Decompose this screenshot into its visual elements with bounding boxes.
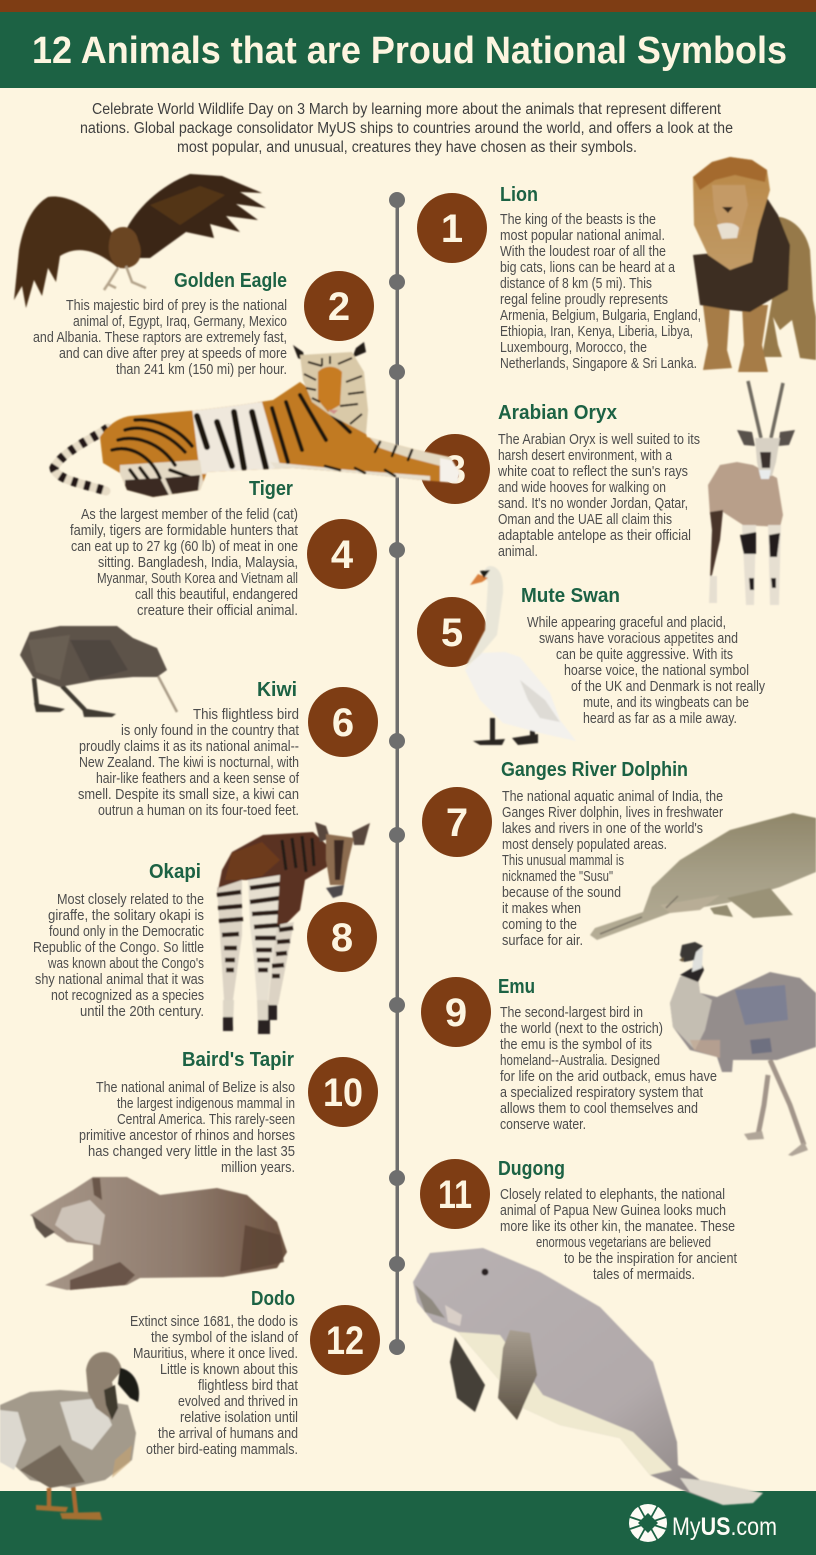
heading and text: golden eagle: This majestic bird of prey is the national xyxy=(66,297,287,314)
heading and text: baird's tapir xyxy=(79,1049,295,1176)
heading and text: okapi: Republic of the Congo. So little xyxy=(33,939,204,956)
icon: ganges river dolphin xyxy=(590,813,816,940)
heading and text: tiger: Tiger xyxy=(249,478,293,500)
heading and text: mute swan: can be quite aggressive. With its xyxy=(556,646,733,663)
heading and text: lion: big cats, lions can be heard at a xyxy=(500,259,676,276)
heading and text: tiger: call this beautiful, endangered xyxy=(135,586,298,603)
heading and text: golden eagle: animal of, Egypt, Iraq, Germany, Mexico xyxy=(73,313,287,330)
heading and text: mute swan: While appearing graceful and placid, xyxy=(527,614,726,631)
heading and text: okapi: giraffe, the solitary okapi is xyxy=(48,907,204,924)
heading and text: lion: Armenia, Belgium, Bulgaria, England, xyxy=(500,307,701,324)
heading and text: ganges river dolphin: surface for air. xyxy=(502,932,583,949)
heading and text: ganges river dolphin: because of the sound xyxy=(502,884,621,901)
heading and text: lion: regal feline proudly represents xyxy=(500,291,668,308)
heading and text: kiwi xyxy=(78,679,300,819)
heading and text: baird's tapir: has changed very little in the last 35 xyxy=(88,1143,295,1160)
heading and text: dodo: relative isolation until xyxy=(180,1409,298,1426)
heading and text: tiger: sitting. Bangladesh, India, Malaysia, xyxy=(98,554,298,571)
heading and text: ganges river dolphin: Ganges River Dolphin xyxy=(501,759,688,781)
heading and text: mute swan: heard as far as a mile away. xyxy=(583,710,737,727)
icon: emu xyxy=(670,942,816,1156)
number badges: 7 xyxy=(446,801,468,845)
heading and text: emu: conserve water. xyxy=(500,1116,586,1133)
heading and text: dugong: tales of mermaids. xyxy=(593,1266,695,1283)
heading and text: emu: Emu xyxy=(498,976,535,998)
heading and text: arabian oryx: and wide hooves for walking on xyxy=(498,479,666,496)
heading and text: kiwi: Kiwi xyxy=(257,679,297,701)
heading and text: lion: distance of 8 km (5 mi). This xyxy=(500,275,652,292)
heading and text: lion: With the loudest roar of all the xyxy=(500,243,666,260)
heading and text: dugong: Closely related to elephants, the national xyxy=(500,1186,725,1203)
header banner xyxy=(0,0,816,88)
heading and text: mute swan: Mute Swan xyxy=(521,585,620,607)
heading and text: tiger: Myanmar, South Korea and Vietnam all xyxy=(97,570,298,587)
heading and text: okapi xyxy=(33,861,204,1020)
heading and text: dodo: Dodo xyxy=(251,1288,295,1310)
heading and text: dodo: the symbol of the island of xyxy=(151,1329,299,1346)
icon: mute swan xyxy=(465,566,576,745)
heading and text: dodo: Mauritius, where it once lived. xyxy=(133,1345,298,1362)
heading and text: dugong: enormous vegetarians are believed xyxy=(536,1234,711,1251)
heading and text: emu: a specialized respiratory system that xyxy=(500,1084,704,1101)
heading and text: arabian oryx xyxy=(497,402,700,560)
heading and text: lion xyxy=(500,184,701,372)
heading and text: dodo: evolved and thrived in xyxy=(178,1393,298,1410)
number badges: 10 xyxy=(323,1071,363,1115)
heading and text: lion: Luxembourg, Morocco, the xyxy=(500,339,647,356)
heading and text: baird's tapir: primitive ancestor of rhinos and horses xyxy=(79,1127,295,1144)
heading and text: okapi: not recognized as a species xyxy=(51,987,204,1004)
number badges: 9 xyxy=(445,991,467,1035)
heading and text: okapi: was known about the Congo's xyxy=(47,955,204,972)
logo: MyUS.com: MyUS.com xyxy=(672,1513,777,1541)
icon: dodo xyxy=(0,1352,139,1520)
heading and text: tiger: can eat up to 27 kg (60 lb) of meat in one xyxy=(71,538,298,555)
heading and text: emu: The second-largest bird in xyxy=(500,1004,643,1021)
heading and text: lion: most popular national animal. xyxy=(500,227,665,244)
heading and text: kiwi: hair-like feathers and a keen sense of xyxy=(96,770,300,787)
heading and text: kiwi: This flightless bird xyxy=(193,706,299,723)
heading and text: ganges river dolphin: This unusual mammal is xyxy=(502,852,624,869)
heading and text: okapi: Okapi xyxy=(149,861,201,883)
heading and text: arabian oryx: animal. xyxy=(498,543,538,560)
heading and text: lion: Lion xyxy=(500,184,538,206)
number badges: 4 xyxy=(331,533,354,577)
icon: lion xyxy=(693,157,816,372)
number badges: 1 xyxy=(441,207,463,251)
heading and text: okapi: Most closely related to the xyxy=(57,891,204,908)
heading and text: tiger: family, tigers are formidable hunters that xyxy=(70,522,299,539)
heading and text: kiwi: outrun a human on its four-toed feet. xyxy=(98,802,299,819)
heading and text: ganges river dolphin: lakes and rivers in one of the world's xyxy=(502,820,703,837)
icon: baird's tapir xyxy=(30,1177,287,1290)
heading and text: ganges river dolphin: Ganges River dolphin, lives in freshwater xyxy=(502,804,723,821)
heading and text: mute swan xyxy=(521,585,765,727)
number badges xyxy=(304,193,492,1375)
intro paragraph: nations. Global package consolidator MyUS ships to countries around the world, and offers a look at the xyxy=(80,120,733,137)
heading and text: okapi: until the 20th century. xyxy=(80,1003,204,1020)
icon: arabian oryx xyxy=(708,381,795,605)
icon: golden eagle xyxy=(14,174,266,308)
heading and text: okapi: shy national animal that it was xyxy=(35,971,204,988)
logo: MyUS.com xyxy=(629,1504,777,1542)
heading and text: lion: Ethiopia, Iran, Kenya, Liberia, Libya, xyxy=(500,323,693,340)
heading and text: ganges river dolphin xyxy=(501,759,723,949)
heading and text: dodo: other bird-eating mammals. xyxy=(146,1441,298,1458)
heading and text: golden eagle: Golden Eagle xyxy=(174,270,287,292)
heading and text: arabian oryx: The Arabian Oryx is well suited to its xyxy=(498,431,700,448)
heading and text: lion: Netherlands, Singapore & Sri Lanka. xyxy=(500,355,697,372)
heading and text: mute swan: hoarse voice, the national symbol xyxy=(564,662,749,679)
heading and text: dodo: Little is known about this xyxy=(160,1361,298,1378)
intro paragraph xyxy=(80,101,733,156)
number badges: 5 xyxy=(441,611,463,655)
intro paragraph: most popular, and unusual, creatures they have chosen as their symbols. xyxy=(177,139,637,156)
heading and text: golden eagle xyxy=(33,270,287,378)
heading and text: baird's tapir: Central America. This rarely-seen xyxy=(117,1111,295,1128)
heading and text: emu: homeland--Australia. Designed xyxy=(500,1052,660,1069)
heading and text: baird's tapir: Baird's Tapir xyxy=(182,1049,294,1071)
heading and text: emu: the world (next to the ostrich) xyxy=(500,1020,663,1037)
heading and text: dodo: Extinct since 1681, the dodo is xyxy=(130,1313,298,1330)
heading and text: dodo xyxy=(130,1288,299,1458)
heading and text: emu: the emu is the symbol of its xyxy=(500,1036,652,1053)
heading and text: baird's tapir: the largest indigenous mammal in xyxy=(117,1095,295,1112)
heading and text: dodo: the arrival of humans and xyxy=(158,1425,298,1442)
heading and text: kiwi: proudly claims it as its national animal-- xyxy=(79,738,299,755)
heading and text: mute swan: of the UK and Denmark is not really xyxy=(571,678,765,695)
number badges: 11 xyxy=(438,1173,472,1217)
heading and text: ganges river dolphin: coming to the xyxy=(502,916,577,933)
heading and text: kiwi: smell. Despite its small size, a kiwi can xyxy=(78,786,299,803)
heading and text: arabian oryx: harsh desert environment, with a xyxy=(498,447,673,464)
heading and text: dugong xyxy=(498,1158,738,1283)
heading and text: tiger: creature their official animal. xyxy=(137,602,298,619)
heading and text: emu xyxy=(498,976,717,1133)
heading and text: dodo: flightless bird that xyxy=(198,1377,299,1394)
heading and text: dugong: to be the inspiration for ancient xyxy=(564,1250,738,1267)
icon: kiwi xyxy=(20,626,177,717)
heading and text: dugong: animal of Papua New Guinea looks much xyxy=(500,1202,726,1219)
heading and text: golden eagle: than 241 km (150 mi) per hour. xyxy=(116,361,287,378)
heading and text: okapi: found only in the Democratic xyxy=(49,923,204,940)
heading and text: kiwi: is only found in the country that xyxy=(121,722,300,739)
heading and text: baird's tapir: million years. xyxy=(221,1159,295,1176)
heading and text: baird's tapir: The national animal of Belize is also xyxy=(96,1079,295,1096)
icon: okapi xyxy=(217,822,370,1034)
heading and text: kiwi: New Zealand. The kiwi is nocturnal, with xyxy=(79,754,299,771)
heading and text: golden eagle: and Albania. These raptors are extremely fast, xyxy=(33,329,287,346)
footer band xyxy=(0,1491,816,1555)
intro paragraph: Celebrate World Wildlife Day on 3 March by learning more about the animals that represent different xyxy=(92,101,722,118)
number badges: 2 xyxy=(328,285,350,329)
heading and text: tiger xyxy=(70,478,299,619)
heading and text: ganges river dolphin: nicknamed the "Susu" xyxy=(502,868,613,885)
heading and text: ganges river dolphin: The national aquatic animal of India, the xyxy=(502,788,723,805)
heading and text: mute swan: mute, and its wingbeats can be xyxy=(583,694,749,711)
timeline xyxy=(389,192,405,1355)
heading and text: arabian oryx: Oman and the UAE all claim this xyxy=(498,511,672,528)
heading and text: ganges river dolphin: most densely populated areas. xyxy=(502,836,667,853)
heading and text: arabian oryx: white coat to reflect the sun's rays xyxy=(497,463,688,480)
number badges: 3 xyxy=(444,448,466,492)
icon: dugong xyxy=(413,1248,763,1505)
number badges: 12 xyxy=(326,1319,364,1363)
heading and text: arabian oryx: Arabian Oryx xyxy=(498,402,617,424)
heading and text: arabian oryx: sand. It's no wonder Jordan, Qatar, xyxy=(498,495,688,512)
heading and text: arabian oryx: adaptable antelope as their official xyxy=(498,527,691,544)
heading and text: dugong: Dugong xyxy=(498,1158,565,1180)
heading and text: dugong: more like its other kin, the manatee. These xyxy=(500,1218,735,1235)
heading and text: lion: The king of the beasts is the xyxy=(500,211,656,228)
title: 12 Animals that are Proud National Symbols xyxy=(32,30,787,72)
icon: tiger xyxy=(54,342,470,500)
heading and text: ganges river dolphin: it makes when xyxy=(502,900,581,917)
number badges: 6 xyxy=(332,701,354,745)
heading and text: tiger: As the largest member of the felid (cat) xyxy=(81,506,298,523)
heading and text: mute swan: swans have voracious appetites and xyxy=(539,630,738,647)
number badges: 8 xyxy=(331,916,353,960)
heading and text: emu: allows them to cool themselves and xyxy=(500,1100,698,1117)
heading and text: golden eagle: and can dive after prey at speeds of more xyxy=(59,345,287,362)
heading and text: emu: for life on the arid outback, emus have xyxy=(500,1068,717,1085)
